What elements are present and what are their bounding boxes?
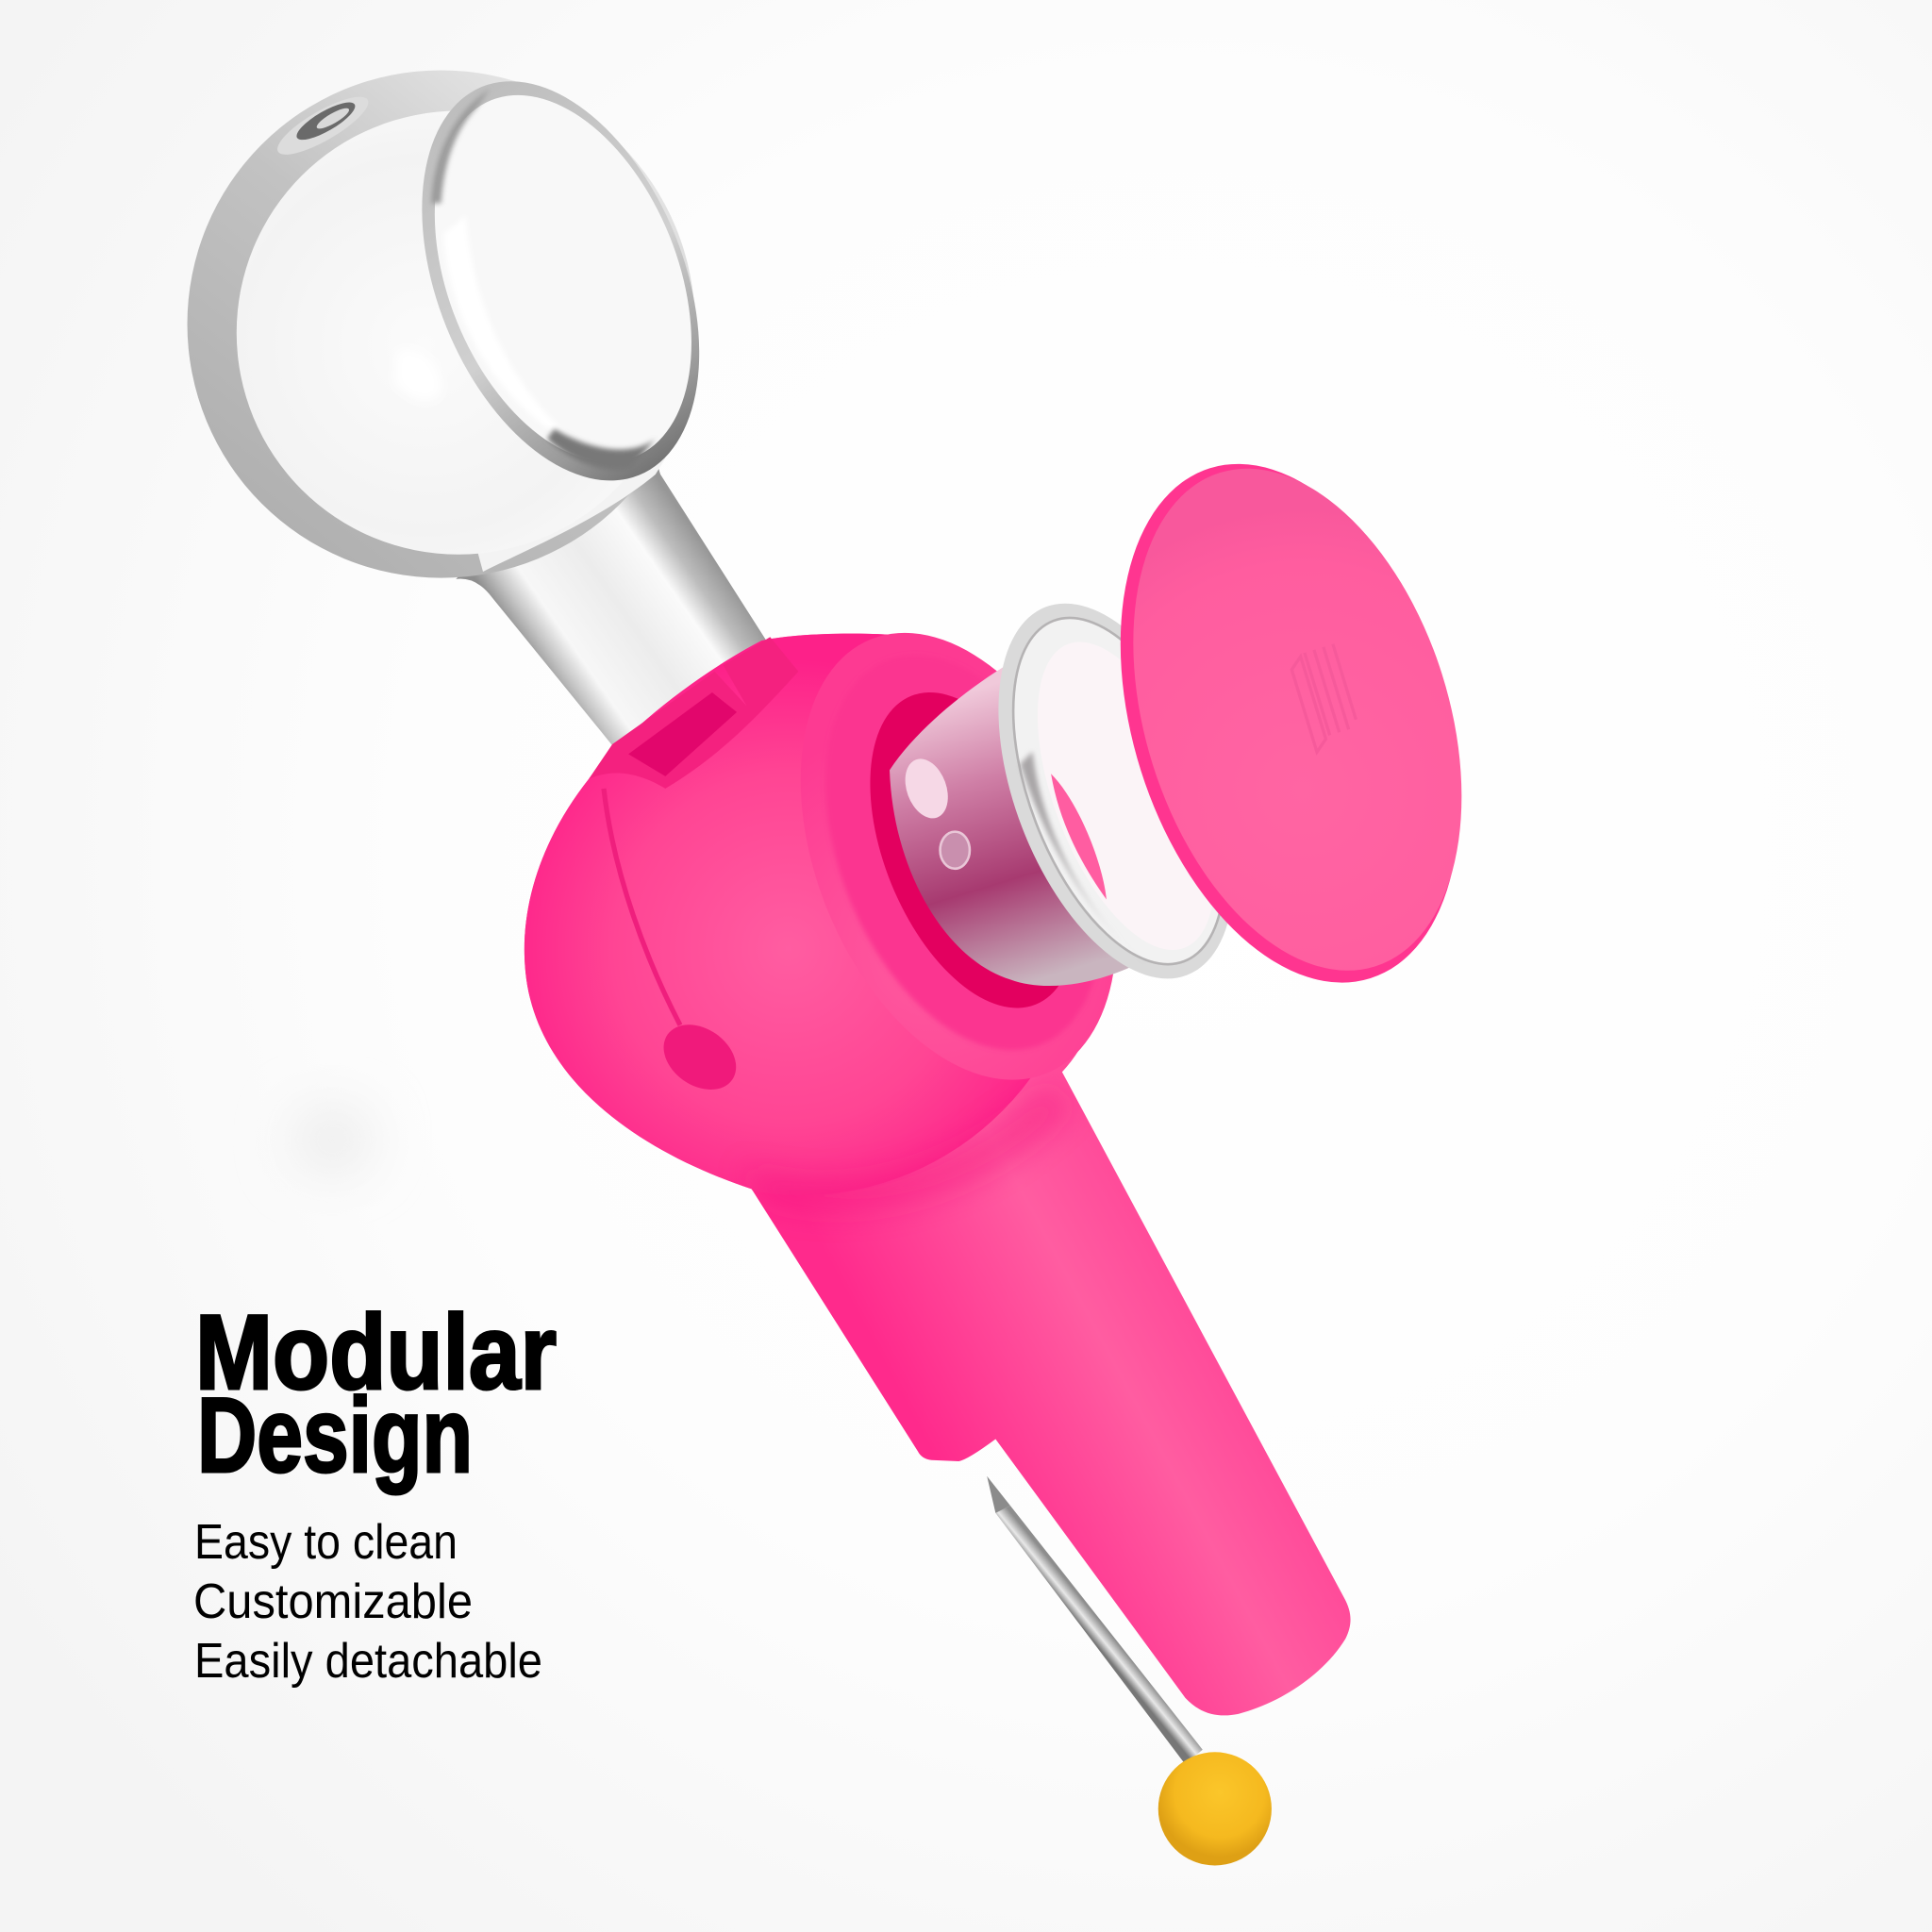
feature list: Easy to clean xyxy=(194,1515,458,1570)
neck junction xyxy=(468,419,665,572)
poker tip xyxy=(987,1476,1010,1513)
rim of bowl opening xyxy=(368,41,754,522)
glass jar xyxy=(890,571,1281,1011)
product illustration: modular pink pipe, exploded view xyxy=(188,41,1520,1865)
heading xyxy=(195,1293,557,1494)
feature list: Easily detachable xyxy=(194,1634,542,1689)
slit hole xyxy=(651,1011,748,1103)
silicone lid xyxy=(1060,422,1520,1025)
heading: Design xyxy=(197,1376,473,1494)
glass neck xyxy=(456,419,766,745)
jar opening xyxy=(1001,619,1251,974)
lid face xyxy=(1075,427,1520,1012)
sphere xyxy=(515,616,1087,1213)
bowl refraction highlight xyxy=(394,349,441,401)
bowl opening xyxy=(385,58,741,500)
inner opening crescent highlight xyxy=(443,216,591,454)
jar reflection xyxy=(897,753,956,824)
lid edge xyxy=(1060,422,1520,1025)
dark glints on rim xyxy=(547,429,656,470)
pink silicone body xyxy=(515,586,1351,1715)
collar opening xyxy=(829,663,1118,1038)
slit in sphere xyxy=(604,789,680,1025)
feature list: Customizable xyxy=(193,1574,473,1629)
notch cavity xyxy=(628,692,737,776)
top notch where the glass seats xyxy=(589,637,798,789)
poker tool xyxy=(987,1476,1272,1865)
jar rim outer xyxy=(951,571,1281,1011)
air hole in bowl xyxy=(271,87,375,164)
feature list xyxy=(193,1515,542,1689)
handle and sphere silhouette xyxy=(525,634,1351,1715)
glint top of rim xyxy=(431,89,491,204)
poker shaft xyxy=(995,1506,1203,1764)
jar rim band xyxy=(971,589,1267,993)
collar ring xyxy=(740,586,1177,1126)
heading: Modular xyxy=(195,1293,557,1411)
collar lip xyxy=(772,614,1156,1091)
jar inner shadow band xyxy=(1020,752,1146,963)
poker ball xyxy=(1158,1752,1272,1865)
glass bowl xyxy=(188,41,766,745)
jar body xyxy=(890,659,1176,986)
soft floor shadow xyxy=(293,1108,372,1172)
embossed logo xyxy=(1288,644,1361,752)
jar etched mark xyxy=(941,832,970,869)
pink reflection in jar xyxy=(1051,774,1107,899)
bowl inner clear area xyxy=(237,111,680,555)
bowl outer shell xyxy=(188,70,695,578)
